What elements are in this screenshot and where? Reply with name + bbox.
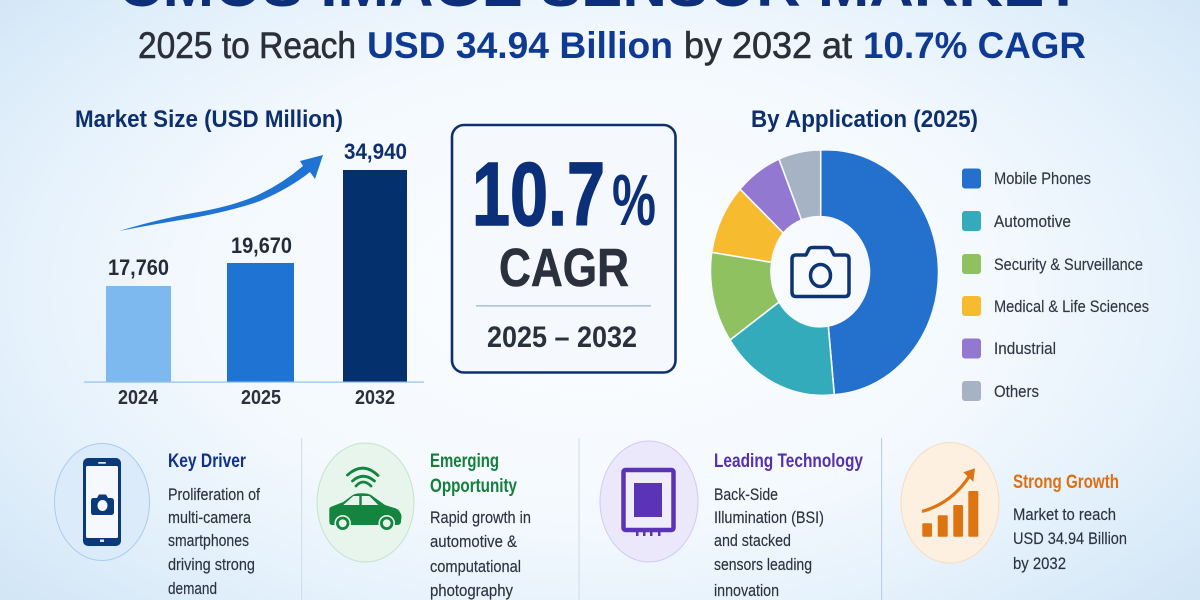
subtitle — [138, 25, 1086, 66]
subtitle: 10.7% CAGR — [863, 25, 1086, 66]
text: strong growth description: Market to reach — [1013, 505, 1116, 524]
bar 2024 — [106, 286, 171, 382]
legend: others: Others — [994, 382, 1039, 401]
text: emerging opportunity description: automotive & — [430, 532, 518, 551]
text: strong growth description: by 2032 — [1013, 554, 1066, 573]
legend: others — [962, 381, 1039, 401]
CAGR value: % — [612, 161, 656, 241]
heading: strong growth: Strong Growth — [1013, 472, 1119, 493]
callout box — [452, 125, 676, 372]
text: emerging opportunity description: photography — [430, 581, 513, 600]
slice: mobile phones — [821, 150, 939, 395]
subtitle: 2025 to Reach — [138, 25, 356, 66]
text: strong growth description — [1013, 505, 1127, 573]
legend — [962, 168, 1149, 401]
text: emerging opportunity description — [430, 508, 531, 600]
panel: CAGR callout — [452, 125, 676, 372]
value labels — [108, 139, 407, 280]
text: key driver description: demand — [168, 579, 217, 598]
year labels: 2024 — [118, 387, 159, 409]
slice: medical and life sciences — [712, 189, 783, 262]
axis line — [84, 382, 424, 383]
legend: automotive: Automotive — [994, 212, 1071, 231]
text: emerging opportunity description: Rapid growth in — [430, 508, 531, 527]
heading: emerging opportunity — [430, 451, 517, 497]
bar 2025 — [227, 263, 294, 382]
heading: market size: Market Size (USD Million) — [75, 106, 343, 133]
text: key driver description — [168, 485, 260, 598]
icon: growth chart — [901, 442, 999, 563]
panel: emerging opportunity — [317, 443, 531, 600]
text: leading technology description — [714, 485, 824, 600]
legend: medical and life sciences — [962, 296, 1149, 316]
panel: leading technology — [600, 441, 863, 600]
text: key driver description: driving strong — [168, 555, 255, 574]
heading: emerging opportunity: Opportunity — [430, 476, 517, 497]
year labels: 2025 — [241, 387, 281, 409]
text: emerging opportunity description: computational — [430, 557, 521, 576]
panel: by application donut — [710, 106, 1149, 401]
year labels — [118, 387, 395, 409]
heading: leading technology: Leading Technology — [714, 451, 863, 472]
legend: security and surveillance — [962, 254, 1143, 274]
text: key driver description: Proliferation of — [168, 485, 260, 504]
donut chart — [710, 150, 939, 395]
text: key driver description: smartphones — [168, 531, 249, 550]
slice: automotive — [730, 302, 834, 395]
divider — [476, 305, 651, 306]
slice: security and surveillance — [710, 252, 779, 340]
icon: camera — [792, 248, 849, 296]
slice: others — [779, 150, 821, 220]
text: leading technology description: sensors leading — [714, 555, 812, 574]
text: leading technology description: Illumination (BSI) — [714, 508, 824, 527]
legend: medical and life sciences: Medical & Life Sciences — [994, 297, 1149, 316]
panel: strong growth — [901, 442, 1127, 573]
panel: key driver — [54, 444, 260, 598]
legend: security and surveillance: Security & Surveillance — [994, 255, 1143, 274]
arrow: growth trend — [119, 155, 323, 231]
CAGR label: CAGR — [499, 238, 629, 298]
icon: sensor chip — [600, 441, 698, 562]
text: leading technology description: innovation — [714, 581, 779, 600]
value labels: 19,670 — [231, 233, 292, 258]
heading: key driver: Key Driver — [168, 451, 246, 472]
panel: market size bar chart — [75, 106, 424, 409]
text: leading technology description: Back-Side — [714, 485, 778, 504]
legend: mobile phones — [962, 168, 1091, 188]
period: 2025 – 2032 — [487, 321, 637, 354]
legend: industrial — [962, 338, 1056, 358]
CAGR value: 10.7 — [472, 145, 605, 245]
legend: mobile phones: Mobile Phones — [994, 169, 1091, 188]
slice: industrial — [740, 159, 802, 233]
text: leading technology description: and stacked — [714, 531, 791, 550]
legend: industrial: Industrial — [994, 339, 1056, 358]
bar 2032 — [343, 170, 407, 382]
text: strong growth description: USD 34.94 Billion — [1013, 529, 1127, 548]
year labels: 2032 — [355, 387, 395, 409]
subtitle: by 2032 at — [684, 25, 853, 66]
text: key driver description: multi-camera — [168, 508, 251, 527]
icon: connected car — [317, 443, 414, 562]
value labels: 34,940 — [344, 139, 407, 164]
subtitle: USD 34.94 Billion — [367, 25, 673, 66]
icon: smartphone with camera — [54, 444, 150, 560]
heading: by application: By Application (2025) — [751, 106, 978, 133]
heading: emerging opportunity: Emerging — [430, 451, 499, 472]
value labels: 17,760 — [108, 255, 169, 280]
legend: automotive — [962, 211, 1071, 231]
